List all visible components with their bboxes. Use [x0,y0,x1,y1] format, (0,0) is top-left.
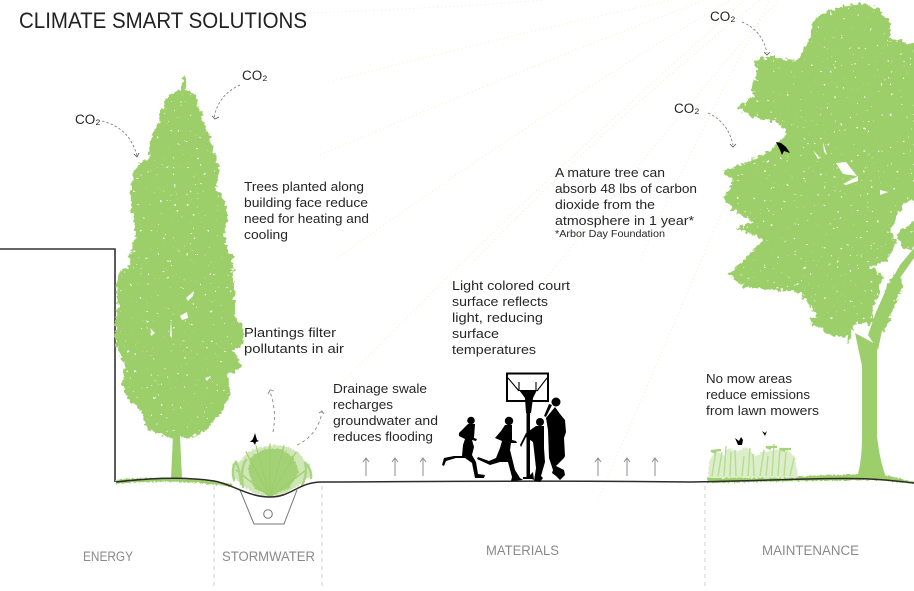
text: trees along building: building face reduce [244,195,368,210]
large tree blotches [813,142,888,195]
ground line [116,478,914,497]
runner one [442,417,485,478]
text: light court: temperatures [452,342,537,357]
CO2 label and arrow far right lower [674,101,736,147]
text: light court [452,278,570,357]
text: plantings: pollutants in air [244,341,345,356]
text: light court: surface reflects [452,294,549,309]
icon: bird on tree [776,142,790,155]
CO2 label and arrow left [75,112,139,157]
CO2 label and arrow far right top [710,9,770,55]
player shooting [544,398,566,480]
column tree [115,75,243,487]
building outline [0,249,115,482]
basketball hoop [507,374,548,479]
text: plantings [244,325,345,356]
up arrows [363,458,658,476]
player blocking [520,418,545,482]
text: drainage swale: reduces flooding [333,429,433,444]
text: mature tree: absorb 48 lbs of carbon [555,181,697,196]
text: trees along building: cooling [244,227,288,242]
text: light court: surface [452,326,499,341]
sun rays [305,0,778,500]
text: no mow [706,371,820,418]
CO2 label and arrow far right lower: CO₂ [674,101,700,116]
large tree [707,3,914,484]
text: drainage swale: recharges [333,397,394,412]
text: trees along building: need for heating and [244,211,369,226]
icon: butterflies [735,431,767,445]
text: mature tree: dioxide from the [555,197,655,212]
text: drainage swale: Drainage swale [333,381,427,396]
text: no mow: from lawn mowers [706,403,820,418]
title: CLIMATE SMART SOLUTIONS [19,8,307,33]
CO2 label and arrow top: CO₂ [242,68,268,83]
text: light court: Light colored court [452,278,570,293]
text: light court: light, reducing [452,310,543,325]
label: stormwater: STORMWATER [222,549,315,564]
CO2 label and arrow top [212,68,268,119]
meadow plants [708,444,798,478]
swale arrows [268,390,324,445]
text: mature tree: atmosphere in 1 year* [555,213,694,228]
label: materials: MATERIALS [486,543,559,558]
text: trees along building: Trees planted along [244,179,364,194]
text: plantings: Plantings filter [244,325,337,340]
swale trench [240,490,297,524]
column tree blotches [150,291,211,381]
runner two [477,417,523,481]
CO2 label and arrow far right top: CO₂ [710,9,736,24]
text: drainage swale [333,381,438,444]
icon: bird on swale [250,433,259,445]
text: mature tree: A mature tree can [555,165,665,180]
label: maintenance: MAINTENANCE [762,543,859,558]
text: trees along building [244,179,369,242]
label: energy: ENERGY [83,549,133,564]
text: no mow: No mow areas [706,371,793,386]
text: no mow: reduce emissions [706,387,811,402]
CO2 label and arrow left: CO₂ [75,112,100,127]
dashed column dividers [214,486,705,590]
text: mature tree [555,165,697,240]
text: drainage swale: groundwater and [333,413,438,428]
text: mature tree: *Arbor Day Foundation [555,229,665,240]
swale shrub [232,444,311,497]
